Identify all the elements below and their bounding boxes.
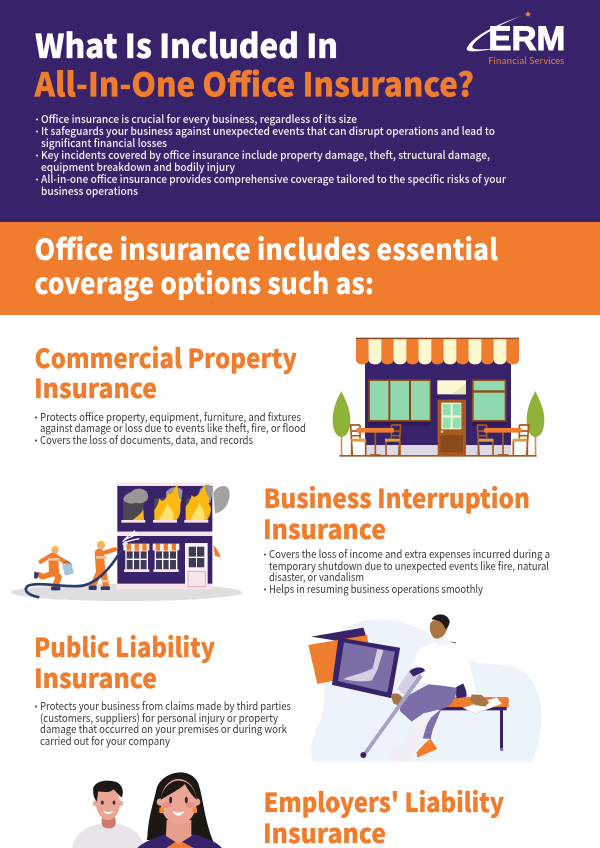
intro bullet list: Office insurance is crucial for every business, regardless of its size <box>41 111 357 127</box>
panel: commercial property insurance text: Insurance <box>34 367 157 406</box>
panel: public liability insurance text: (customers, suppliers) for personal injury or property <box>40 710 278 726</box>
panel: business interruption insurance text: Helps in resuming business operations smoothly <box>269 581 483 597</box>
panel: commercial property insurance text: against damage or loss due to events like theft, fire, or flood <box>40 420 306 436</box>
logo: ERM Financial Services: Financial Services <box>488 53 565 67</box>
logo: ERM Financial Services <box>467 11 565 67</box>
intro bullet list: equipment breakdown and bodily injury <box>41 159 235 175</box>
panel: public liability insurance text <box>34 626 291 749</box>
panel: business interruption insurance text <box>263 477 550 597</box>
panel: business interruption insurance text: Insurance <box>263 508 386 547</box>
intro bullet list: It safeguards your business against unexpected events that can disrupt operations and lead to <box>41 123 495 139</box>
panel: orange banner: Office insurance includes essential <box>34 227 498 269</box>
panel: header <box>0 0 600 222</box>
intro bullet list: All-in-one office insurance provides comprehensive coverage tailored to the specific risks of your <box>41 171 506 187</box>
intro bullet list: business operations <box>41 183 138 199</box>
panel: business interruption insurance text: disaster, or vandalism <box>269 569 364 585</box>
panel: commercial property insurance text: Commercial Property <box>34 337 297 376</box>
panel: public liability insurance text: Protects your business from claims made by third parties <box>40 698 291 714</box>
panel: public liability insurance text: Public Liability <box>34 626 215 665</box>
title <box>34 20 474 106</box>
panel: commercial property insurance text <box>34 337 306 448</box>
title: What Is Included In <box>35 20 338 68</box>
panel: commercial property insurance text: Covers the loss of documents, data, and records <box>40 432 253 448</box>
panel: business interruption insurance text: temporary shutdown due to unexpected events like fire, natural <box>269 558 549 574</box>
panel: employers' liability insurance text <box>263 781 504 848</box>
intro bullet list: significant financial losses <box>41 135 167 151</box>
panel: employers' liability insurance text: Employers' Liability <box>264 781 504 820</box>
illustration: employer and employee portraits <box>72 772 222 848</box>
illustration: injured man with x-ray on bench <box>308 614 541 762</box>
panel: orange banner: coverage options such as: <box>34 261 374 303</box>
intro bullet list: Key incidents covered by office insurance include property damage, theft, structural damage, <box>41 147 490 163</box>
illustration: firefighters at burning building <box>11 483 242 601</box>
title: All-In-One Office Insurance? <box>34 58 474 106</box>
logo: ERM Financial Services: ERM <box>488 20 565 58</box>
illustration: storefront <box>333 338 544 457</box>
panel: public liability insurance text: carried out for your company <box>40 733 170 749</box>
panel: business interruption insurance text: Business Interruption <box>264 477 530 516</box>
panel: orange banner <box>0 222 600 315</box>
panel: commercial property insurance text: Protects office property, equipment, furniture, and fixtures <box>40 409 301 425</box>
panel: public liability insurance text: Insurance <box>34 657 157 696</box>
panel: business interruption insurance text: Covers the loss of income and extra expenses incurred during a <box>269 546 550 562</box>
panel: public liability insurance text: damage that occurred on your premises or during work <box>40 721 287 737</box>
intro bullet list <box>36 111 506 199</box>
